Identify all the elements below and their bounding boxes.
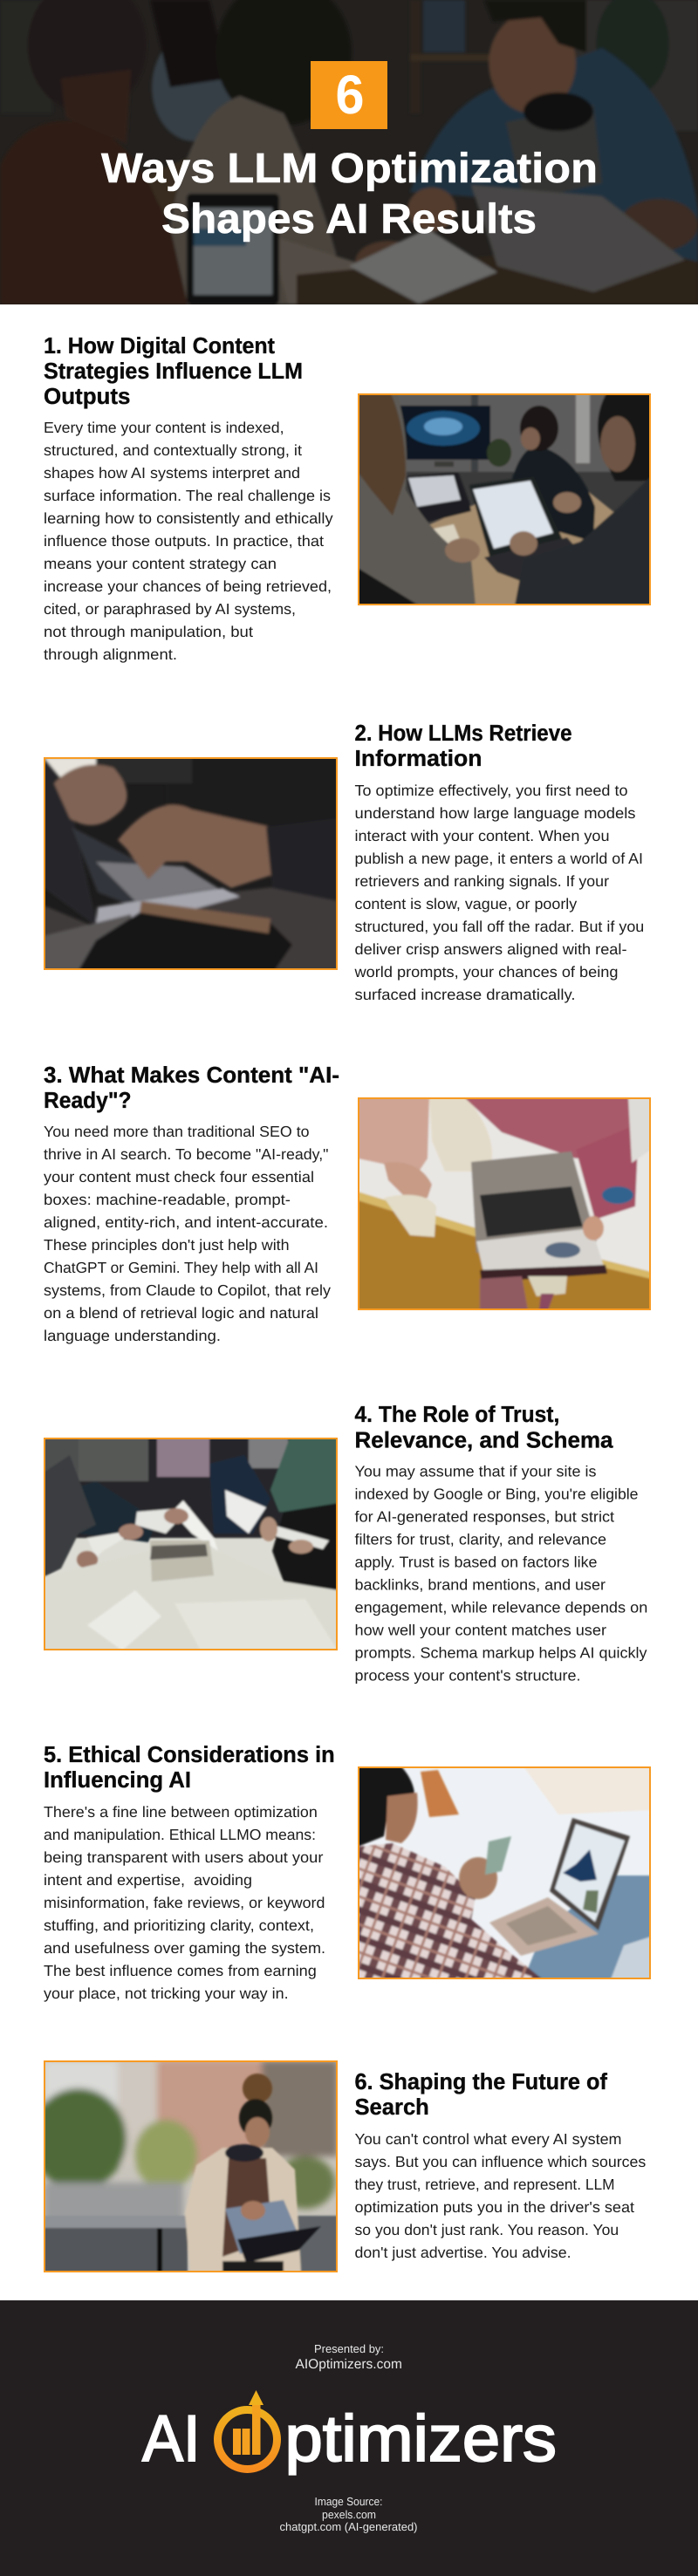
footer [0, 2300, 698, 2576]
presented by: Presented by: [314, 2342, 384, 2355]
body text 2: publish a new page, it enters a world of AI [354, 850, 643, 867]
body text 2: interact with your content. When you [354, 827, 609, 844]
image source credits: Image Source: [314, 2495, 382, 2508]
body text 4: apply. Trust is based on factors like [354, 1553, 597, 1570]
body text 4: filters for trust, clarity, and relevance [354, 1530, 606, 1548]
title: Ways LLM Optimization [101, 146, 598, 192]
photo 5: woman with phone and laptop showing chart [358, 1766, 651, 1979]
body text 1: through alignment. [44, 646, 177, 663]
body text 5: stuffing, and prioritizing clarity, context, [44, 1917, 314, 1934]
body text 3: These principles don't just help with [44, 1236, 290, 1254]
body text 1: increase your chances of being retrieved, [44, 577, 332, 595]
body text 3: You need more than traditional SEO to [44, 1123, 310, 1140]
panel: section 5 [44, 1741, 651, 2002]
title: Shapes AI Results [161, 196, 537, 243]
body text 5: misinformation, fake reviews, or keyword [44, 1894, 325, 1911]
body text 4: indexed by Google or Bing, you're eligible [354, 1485, 639, 1502]
body text 5: The best influence comes from earning [44, 1962, 317, 1979]
heading 1 [44, 332, 303, 409]
body text 2: structured, you fall off the radar. But if you [354, 918, 644, 935]
photo 2: hands typing on a laptop [44, 757, 338, 970]
heading 5: 5. Ethical Considerations in [44, 1741, 335, 1767]
heading 3: Ready"? [44, 1087, 131, 1113]
body text 1: structured, and contextually strong, it [44, 441, 302, 459]
body text 1: means your content strategy can [44, 555, 277, 572]
heading 1: 1. How Digital Content [44, 332, 275, 359]
body text 6: they trust, retrieve, and represent. LLM [354, 2176, 614, 2193]
heading 3: 3. What Makes Content "AI- [44, 1062, 339, 1088]
heading 5 [44, 1741, 335, 1793]
body text 5: intent and expertise, avoiding [44, 1871, 252, 1889]
body text 1: influence those outputs. In practice, that [44, 532, 324, 550]
body text 2: world prompts, your chances of being [353, 963, 618, 981]
body text 2: surfaced increase dramatically. [354, 986, 576, 1003]
photo 6: man with headphones holding a laptop on a city street [44, 2060, 338, 2272]
body text 6: don't just advertise. You advise. [354, 2244, 571, 2261]
panel: section 6 [31, 2060, 647, 2272]
body text 3: your content must check four essential [44, 1168, 314, 1186]
heading 3 [44, 1062, 339, 1113]
body text 3: on a blend of retrieval logic and natural [44, 1304, 318, 1322]
heading 6: 6. Shaping the Future of [354, 2068, 607, 2094]
body text 3: aligned, entity-rich, and intent-accurate. [44, 1213, 328, 1231]
body text 5: being transparent with users about your [44, 1848, 324, 1866]
body text 1: learning how to consistently and ethically [44, 509, 333, 527]
image source credits: pexels.com [322, 2508, 376, 2521]
title [101, 146, 598, 243]
body text 1: surface information. The real challenge is [44, 487, 331, 504]
panel: section 3 [44, 1062, 651, 1344]
body text 3: ChatGPT or Gemini. They help with all AI [44, 1259, 318, 1276]
heading 6 [354, 2068, 607, 2120]
body text 6: says. But you can influence which sources [354, 2153, 647, 2170]
heading 4: 4. The Role of Trust, [354, 1401, 559, 1427]
photo 3: laptop on a bed above a parquet floor [358, 1097, 651, 1310]
body text 1: cited, or paraphrased by AI systems, [44, 600, 296, 618]
panel: section 1 [44, 332, 651, 663]
body text 5: and manipulation. Ethical LLMO means: [44, 1826, 316, 1843]
number badge: 6 [335, 65, 365, 126]
image source credits: chatgpt.com (AI-generated) [279, 2520, 417, 2533]
presented by [295, 2342, 402, 2372]
logo icon: ring with bars and arrow [218, 2390, 277, 2469]
heading 2: Information [354, 745, 482, 771]
body text 4: engagement, while relevance depends on [354, 1598, 647, 1616]
body text 3: systems, from Claude to Copilot, that rely [44, 1281, 331, 1299]
body text 6: so you don't just rank. You reason. You [354, 2221, 619, 2238]
body text 4: how well your content matches user [354, 1621, 606, 1638]
heading 2 [354, 720, 572, 771]
panel: section 4 [44, 1401, 647, 1684]
logo: AI Optimizers: AI [142, 2402, 201, 2475]
body text 3: language understanding. [44, 1327, 221, 1344]
body text 2 [353, 782, 644, 1003]
image source credits [279, 2495, 417, 2533]
body text 3: thrive in AI search. To become "AI-ready," [44, 1145, 328, 1163]
body text 6 [354, 2130, 647, 2261]
body text 2: To optimize effectively, you first need to [354, 782, 628, 799]
heading 5: Influencing AI [44, 1766, 191, 1793]
body text 1: shapes how AI systems interpret and [44, 464, 300, 482]
body text 4: backlinks, brand mentions, and user [354, 1575, 606, 1593]
body text 5: There's a fine line between optimization [44, 1803, 318, 1821]
body text 5: your place, not tricking your way in. [44, 1985, 289, 2002]
body text 4 [354, 1462, 647, 1684]
body text 4: process your content's structure. [354, 1666, 581, 1684]
body text 1: Every time your content is indexed, [44, 419, 284, 436]
heading 2: 2. How LLMs Retrieve [354, 720, 572, 746]
body text 3: boxes: machine-readable, prompt- [44, 1191, 291, 1208]
hero photo: team meeting around laptops, darkened [0, 0, 698, 304]
photo 1: team at laptops with network display [358, 393, 651, 605]
heading 1: Strategies Influence LLM [44, 358, 303, 384]
body text 5 [44, 1803, 325, 2002]
body text 6: optimization puts you in the driver's seat [354, 2198, 634, 2216]
body text 6: You can't control what every AI system [354, 2130, 621, 2148]
heading 1: Outputs [44, 383, 131, 409]
body text 1 [44, 419, 333, 663]
heading 6: Search [354, 2094, 429, 2120]
body text 2: retrievers and ranking signals. If your [354, 872, 609, 890]
body text 4: You may assume that if your site is [354, 1462, 597, 1479]
presented by: AIOptimizers.com [295, 2357, 402, 2372]
panel: section 2 [44, 720, 644, 1003]
body text 1: not through manipulation, but [44, 623, 253, 640]
body text 2: content is slow, vague, or poorly [354, 895, 578, 912]
body text 5: and usefulness over gaming the system. [44, 1939, 325, 1957]
body text 3 [44, 1123, 331, 1344]
body text 4: for AI-generated responses, but strict [354, 1507, 614, 1525]
hero banner [0, 0, 698, 304]
body text 4: prompts. Schema markup helps AI quickly [354, 1643, 647, 1661]
heading 4 [354, 1401, 613, 1453]
body text 2: deliver crisp answers aligned with real- [354, 940, 627, 958]
body text 2: understand how large language models [354, 804, 636, 822]
photo 4: group sitting on floor with papers [44, 1438, 338, 1650]
logo: AI Optimizers [142, 2390, 557, 2475]
heading 4: Relevance, and Schema [354, 1427, 613, 1453]
logo: AI Optimizers: ptimizers [284, 2402, 557, 2475]
number badge [311, 61, 387, 129]
